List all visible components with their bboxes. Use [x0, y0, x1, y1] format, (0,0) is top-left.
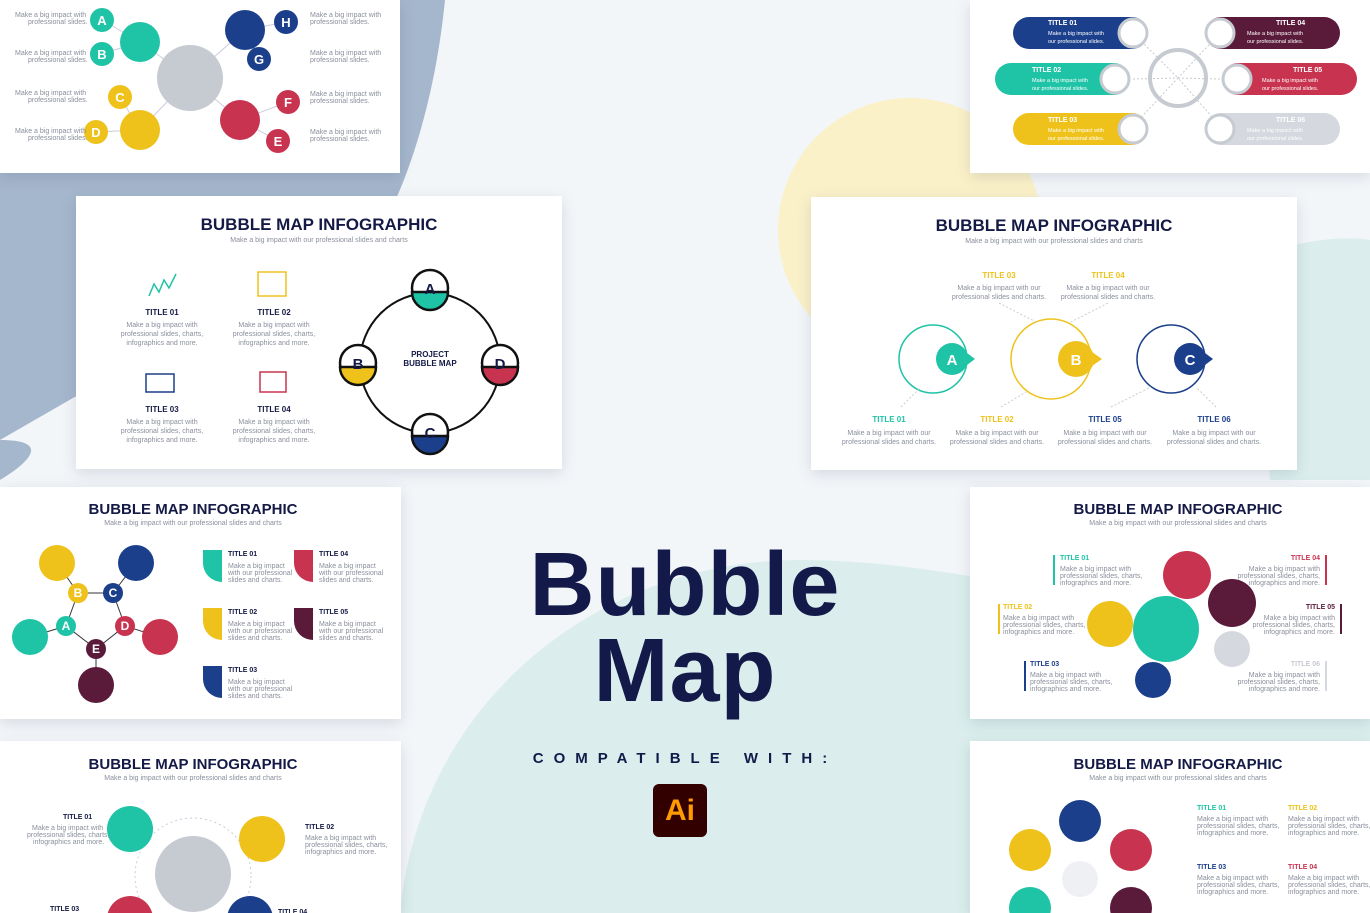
card 3: top-right pill titles: Make a big impact with: [1032, 78, 1088, 84]
card 1: top-left bubble map A-H: Make a big impact with: [310, 129, 381, 136]
card 8: bottom right: TITLE 01: [1197, 805, 1226, 812]
card 2: four titles + project bubble map: TITLE 02: [257, 308, 291, 317]
card 4: A B C arrow bubbles: TITLE 01: [872, 415, 906, 424]
card 1: top-left bubble map A-H: [0, 0, 400, 173]
card 5: left middle bubble network with titles: with our professional: [318, 628, 384, 635]
card 6: right middle cluster: Make a big impact with: [1060, 566, 1131, 573]
card 5: left middle bubble network with titles: [0, 487, 401, 719]
card 3: top-right pill titles: our professional slides.: [1032, 86, 1089, 92]
card 5: left middle bubble network with titles: Make a big impact: [319, 621, 376, 628]
card 3: top-right pill titles: TITLE 02: [1032, 67, 1061, 74]
card 5: left middle bubble network with titles: Make a big impact with our professional slides and charts: [104, 520, 282, 527]
card 4: A B C arrow bubbles: professional slides and charts.: [1061, 294, 1155, 301]
card 8: bottom right: professional slides, charts,: [1197, 823, 1280, 830]
card 2: four titles + project bubble map: B: [353, 356, 364, 373]
card 7: bottom left: Make a big impact with: [32, 825, 103, 832]
card 8: bottom right: infographics and more.: [1288, 889, 1359, 896]
card 7: bottom left: infographics and more.: [33, 839, 104, 846]
card 4: A B C arrow bubbles: Make a big impact with our: [847, 430, 931, 437]
card 5: left middle bubble network with titles: slides and charts.: [319, 577, 374, 584]
card 1: top-left bubble map A-H: B: [97, 47, 107, 62]
card 8: bottom right: infographics and more.: [1197, 889, 1268, 896]
card 3: top-right pill titles: our professional slides.: [1262, 86, 1319, 92]
card 8: bottom right: [970, 741, 1370, 913]
card 5: left middle bubble network with titles: slides and charts.: [228, 635, 283, 642]
card 8: bottom right: BUBBLE MAP INFOGRAPHIC: [1074, 756, 1283, 773]
card 5: left middle bubble network with titles: E: [92, 642, 100, 656]
card 1: top-left bubble map A-H: D: [91, 125, 101, 140]
card 2: four titles + project bubble map: [76, 196, 562, 469]
card 7: bottom left: BUBBLE MAP INFOGRAPHIC: [89, 756, 298, 773]
card 7: bottom left: TITLE 02: [305, 824, 334, 831]
card 4: A B C arrow bubbles: professional slides and charts.: [842, 439, 936, 446]
card 6: right middle cluster: TITLE 06: [1291, 661, 1320, 668]
card 6: right middle cluster: professional slides, charts,: [1238, 573, 1320, 580]
card 5: left middle bubble network with titles: TITLE 02: [228, 609, 257, 616]
card 1: top-left bubble map A-H: F: [284, 95, 292, 110]
card 6: right middle cluster: infographics and more.: [1030, 686, 1101, 693]
card 3: top-right pill titles: Make a big impact with: [1048, 128, 1104, 134]
card 5: left middle bubble network with titles: TITLE 01: [228, 551, 257, 558]
card 4: A B C arrow bubbles: TITLE 05: [1088, 415, 1122, 424]
card 4: A B C arrow bubbles: professional slides and charts.: [950, 439, 1044, 446]
card 3: top-right pill titles: [970, 0, 1370, 173]
card 5: left middle bubble network with titles: BUBBLE MAP INFOGRAPHIC: [89, 501, 298, 518]
card 6: right middle cluster: Make a big impact with our professional slides and charts: [1089, 520, 1267, 527]
card 5: left middle bubble network with titles: with our professional: [227, 570, 293, 577]
card 1: top-left bubble map A-H: professional slides.: [28, 19, 88, 26]
card 2: four titles + project bubble map: infographics and more.: [238, 340, 310, 347]
card 3: top-right pill titles: TITLE 05: [1293, 67, 1322, 74]
card 8: bottom right: TITLE 03: [1197, 864, 1226, 871]
card 4: A B C arrow bubbles: TITLE 06: [1197, 415, 1231, 424]
card 4: A B C arrow bubbles: C: [1185, 352, 1196, 369]
card 2: four titles + project bubble map: Make a big impact with: [238, 419, 310, 426]
card 2: four titles + project bubble map: Make a big impact with: [238, 322, 310, 329]
card 5: left middle bubble network with titles: C: [109, 586, 118, 600]
card 4: A B C arrow bubbles: A: [947, 352, 958, 369]
card 5: left middle bubble network with titles: Make a big impact: [319, 563, 376, 570]
card 7: bottom left: Make a big impact with our professional slides and charts: [104, 775, 282, 782]
card 2: four titles + project bubble map: Make a big impact with: [126, 419, 198, 426]
card 8: bottom right: Make a big impact with our professional slides and charts: [1089, 775, 1267, 782]
card 6: right middle cluster: Make a big impact with: [1249, 672, 1320, 679]
card 5: left middle bubble network with titles: A: [62, 619, 71, 633]
main title: Bubble: [530, 535, 840, 635]
card 8: bottom right: Make a big impact with: [1197, 875, 1268, 882]
card 1: top-left bubble map A-H: Make a big impact with: [310, 12, 381, 19]
card 2: four titles + project bubble map: professional slides, charts,: [121, 428, 203, 435]
card 4: A B C arrow bubbles: Make a big impact with our professional slides and charts: [965, 238, 1143, 245]
card 4: A B C arrow bubbles: TITLE 03: [982, 271, 1016, 280]
card 8: bottom right: infographics and more.: [1288, 830, 1359, 837]
card 3: top-right pill titles: our professional slides.: [1247, 136, 1304, 142]
card 3: top-right pill titles: TITLE 03: [1048, 117, 1077, 124]
card 6: right middle cluster: professional slides, charts,: [1060, 573, 1143, 580]
card 5: left middle bubble network with titles: with our professional: [227, 628, 293, 635]
card 4: A B C arrow bubbles: professional slides and charts.: [952, 294, 1046, 301]
card 1: top-left bubble map A-H: Make a big impact with: [15, 12, 86, 19]
card 2: four titles + project bubble map: A: [425, 281, 436, 298]
card 7: bottom left: infographics and more.: [305, 849, 376, 856]
card 2: four titles + project bubble map: infographics and more.: [126, 340, 198, 347]
card 4: A B C arrow bubbles: Make a big impact with our: [1063, 430, 1147, 437]
card 5: left middle bubble network with titles: slides and charts.: [228, 693, 283, 700]
card 4: A B C arrow bubbles: professional slides and charts.: [1058, 439, 1152, 446]
card 2: four titles + project bubble map: Make a big impact with our professional slides and charts: [230, 237, 408, 244]
card 4: A B C arrow bubbles: [811, 197, 1297, 470]
card 1: top-left bubble map A-H: A: [97, 13, 107, 28]
card 5: left middle bubble network with titles: TITLE 03: [228, 667, 257, 674]
card 1: top-left bubble map A-H: G: [254, 52, 264, 67]
card 2: four titles + project bubble map: Make a big impact with: [126, 322, 198, 329]
card 2: four titles + project bubble map: TITLE 01: [145, 308, 179, 317]
card 6: right middle cluster: infographics and more.: [1249, 686, 1320, 693]
card 8: bottom right: TITLE 04: [1288, 864, 1317, 871]
card 4: A B C arrow bubbles: Make a big impact with our: [957, 285, 1041, 292]
card 5: left middle bubble network with titles: Make a big impact: [228, 621, 285, 628]
card 4: A B C arrow bubbles: TITLE 04: [1091, 271, 1125, 280]
card 3: top-right pill titles: TITLE 06: [1276, 117, 1305, 124]
card 4: A B C arrow bubbles: TITLE 02: [980, 415, 1014, 424]
card 4: A B C arrow bubbles: Make a big impact with our: [955, 430, 1039, 437]
card 2: four titles + project bubble map: C: [425, 425, 436, 442]
card 2: four titles + project bubble map: professional slides, charts,: [121, 331, 203, 338]
card 1: top-left bubble map A-H: Make a big impact with: [15, 128, 86, 135]
card 5: left middle bubble network with titles: with our professional: [318, 570, 384, 577]
card 2: four titles + project bubble map: D: [495, 356, 506, 373]
card 3: top-right pill titles: Make a big impact with: [1262, 78, 1318, 84]
card 4: A B C arrow bubbles: BUBBLE MAP INFOGRAPHIC: [936, 216, 1172, 235]
compatible with text: COMPATIBLE WITH:: [533, 750, 837, 767]
card 7: bottom left: Make a big impact with: [305, 835, 376, 842]
main title: Map: [594, 621, 776, 721]
card 6: right middle cluster: TITLE 01: [1060, 555, 1089, 562]
card 4: A B C arrow bubbles: B: [1071, 352, 1082, 369]
card 6: right middle cluster: professional slides, charts,: [1003, 622, 1086, 629]
card 6: right middle cluster: infographics and more.: [1264, 629, 1335, 636]
card 1: top-left bubble map A-H: Make a big impact with: [15, 90, 86, 97]
card 2: four titles + project bubble map: TITLE 03: [145, 405, 179, 414]
card 3: top-right pill titles: Make a big impact with: [1048, 31, 1104, 37]
card 7: bottom left: [0, 741, 401, 913]
card 6: right middle cluster: professional slides, charts,: [1030, 679, 1113, 686]
card 1: top-left bubble map A-H: professional slides.: [310, 136, 370, 143]
card 7: bottom left: TITLE 03: [50, 906, 79, 913]
card 4: A B C arrow bubbles: Make a big impact with our: [1172, 430, 1256, 437]
card 7: bottom left: professional slides, charts,: [27, 832, 110, 839]
card 1: top-left bubble map A-H: H: [281, 15, 291, 30]
card 6: right middle cluster: TITLE 02: [1003, 604, 1032, 611]
card 5: left middle bubble network with titles: with our professional: [227, 686, 293, 693]
card 6: right middle cluster: professional slides, charts,: [1253, 622, 1335, 629]
card 6: right middle cluster: Make a big impact with: [1249, 566, 1320, 573]
card 2: four titles + project bubble map: PROJECT: [411, 350, 449, 359]
card 2: four titles + project bubble map: infographics and more.: [126, 437, 198, 444]
card 6: right middle cluster: infographics and more.: [1249, 580, 1320, 587]
card 5: left middle bubble network with titles: D: [121, 619, 130, 633]
card 8: bottom right: Make a big impact with: [1197, 816, 1268, 823]
card 6: right middle cluster: Make a big impact with: [1264, 615, 1335, 622]
card 1: top-left bubble map A-H: E: [274, 134, 283, 149]
card 1: top-left bubble map A-H: professional slides.: [310, 98, 370, 105]
card 8: bottom right: professional slides, charts,: [1197, 882, 1280, 889]
card 1: top-left bubble map A-H: professional slides.: [28, 57, 88, 64]
card 1: top-left bubble map A-H: Make a big impact with: [310, 91, 381, 98]
card 2: four titles + project bubble map: professional slides, charts,: [233, 428, 315, 435]
card 1: top-left bubble map A-H: Make a big impact with: [15, 50, 86, 57]
card 8: bottom right: Make a big impact with: [1288, 875, 1359, 882]
main title: [530, 535, 840, 721]
card 2: four titles + project bubble map: BUBBLE MAP: [403, 359, 457, 368]
card 5: left middle bubble network with titles: TITLE 05: [319, 609, 348, 616]
icon: Adobe Illustrator: [653, 784, 707, 837]
card 6: right middle cluster: [970, 487, 1370, 719]
card 6: right middle cluster: TITLE 05: [1306, 604, 1335, 611]
icon: Adobe Illustrator: Ai: [665, 794, 695, 827]
card 1: top-left bubble map A-H: professional slides.: [28, 135, 88, 142]
card 6: right middle cluster: infographics and more.: [1060, 580, 1131, 587]
card 3: top-right pill titles: Make a big impact with: [1247, 31, 1303, 37]
card 2: four titles + project bubble map: BUBBLE MAP INFOGRAPHIC: [201, 215, 437, 234]
card 6: right middle cluster: Make a big impact with: [1003, 615, 1074, 622]
card 3: top-right pill titles: our professional slides.: [1247, 39, 1304, 45]
card 7: bottom left: TITLE 01: [63, 814, 92, 821]
card 6: right middle cluster: BUBBLE MAP INFOGRAPHIC: [1074, 501, 1283, 518]
card 8: bottom right: Make a big impact with: [1288, 816, 1359, 823]
card 1: top-left bubble map A-H: professional slides.: [310, 57, 370, 64]
card 1: top-left bubble map A-H: C: [115, 90, 125, 105]
card 6: right middle cluster: TITLE 03: [1030, 661, 1059, 668]
card 2: four titles + project bubble map: infographics and more.: [238, 437, 310, 444]
card 6: right middle cluster: TITLE 04: [1291, 555, 1320, 562]
card 2: four titles + project bubble map: TITLE 04: [257, 405, 291, 414]
card 6: right middle cluster: infographics and more.: [1003, 629, 1074, 636]
card 3: top-right pill titles: our professional slides.: [1048, 39, 1105, 45]
card 3: top-right pill titles: Make a big impact with: [1247, 128, 1303, 134]
card 5: left middle bubble network with titles: Make a big impact: [228, 563, 285, 570]
card 5: left middle bubble network with titles: TITLE 04: [319, 551, 348, 558]
card 5: left middle bubble network with titles: slides and charts.: [228, 577, 283, 584]
card 5: left middle bubble network with titles: slides and charts.: [319, 635, 374, 642]
card 6: right middle cluster: Make a big impact with: [1030, 672, 1101, 679]
card 4: A B C arrow bubbles: professional slides and charts.: [1167, 439, 1261, 446]
card 3: top-right pill titles: TITLE 04: [1276, 20, 1305, 27]
card 1: top-left bubble map A-H: professional slides.: [28, 97, 88, 104]
card 2: four titles + project bubble map: professional slides, charts,: [233, 331, 315, 338]
card 3: top-right pill titles: TITLE 01: [1048, 20, 1077, 27]
card 5: left middle bubble network with titles: B: [74, 586, 83, 600]
card 7: bottom left: professional slides, charts,: [305, 842, 388, 849]
card 8: bottom right: TITLE 02: [1288, 805, 1317, 812]
card 1: top-left bubble map A-H: professional slides.: [310, 19, 370, 26]
card 4: A B C arrow bubbles: Make a big impact with our: [1066, 285, 1150, 292]
card 8: bottom right: professional slides, charts,: [1288, 882, 1370, 889]
card 5: left middle bubble network with titles: Make a big impact: [228, 679, 285, 686]
card 8: bottom right: professional slides, charts,: [1288, 823, 1370, 830]
card 6: right middle cluster: professional slides, charts,: [1238, 679, 1320, 686]
card 1: top-left bubble map A-H: Make a big impact with: [310, 50, 381, 57]
card 8: bottom right: infographics and more.: [1197, 830, 1268, 837]
card 3: top-right pill titles: our professional slides.: [1048, 136, 1105, 142]
